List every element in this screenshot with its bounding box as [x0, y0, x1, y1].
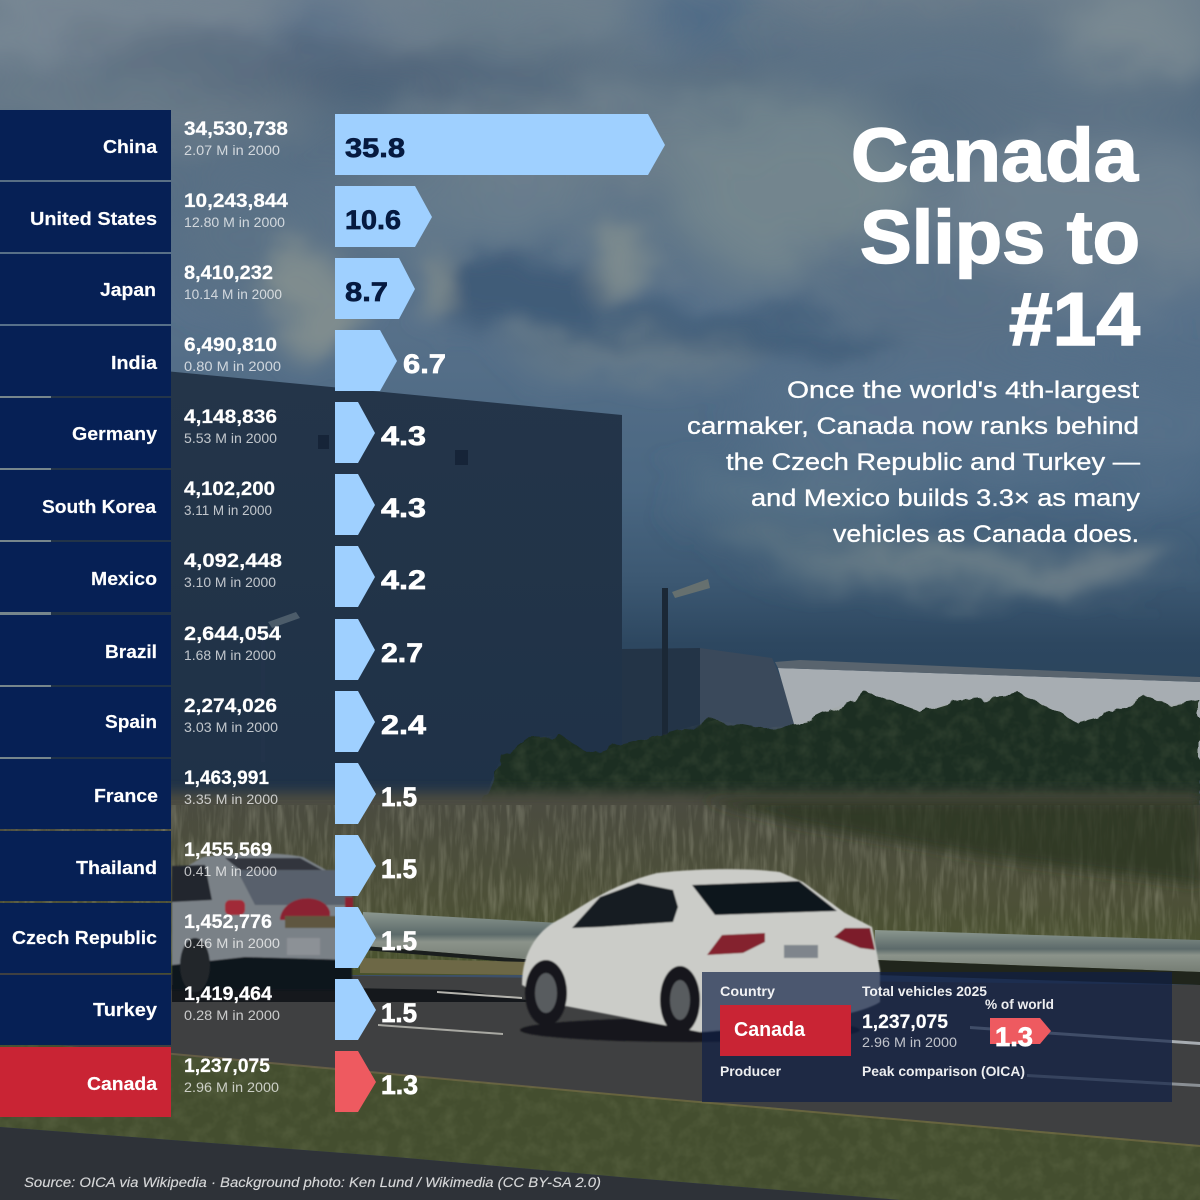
row: Germany: 5.53 M in 2000 [184, 431, 277, 446]
row: South Korea: 4,102,200 [184, 478, 275, 500]
row: Japan: 8,410,232 [184, 262, 273, 284]
row: Czech Republic: 0.46 M in 2000 [184, 936, 280, 951]
highway [0, 972, 1200, 1200]
row: Germany: Germany [72, 423, 158, 444]
row: Spain: 3.03 M in 2000 [184, 720, 278, 735]
row: United States: 10,243,844 [184, 190, 288, 212]
dark warehouse building [51, 360, 622, 800]
row: South Korea [0, 470, 426, 540]
row: Germany [0, 398, 426, 468]
legend totals: 2.96 M in 2000 [862, 1035, 957, 1050]
row: India: 0.80 M in 2000 [184, 359, 281, 374]
subtitle text block [687, 377, 1141, 548]
legend footers: Producer [720, 1064, 782, 1079]
legend column headers [720, 984, 1054, 1012]
bar chart: country production ranking [0, 110, 665, 1117]
row: Turkey: 1.5 [381, 998, 417, 1028]
row: Canada (highlighted): 2.96 M in 2000 [184, 1080, 279, 1095]
subtitle text block: and Mexico builds 3.3× as many [751, 485, 1141, 512]
row: Turkey [0, 975, 417, 1045]
row: Thailand: 1.5 [381, 854, 417, 884]
row: China: China [103, 136, 158, 157]
row: France: 3.35 M in 2000 [184, 792, 278, 807]
row: Mexico [0, 542, 426, 612]
row: France [0, 759, 417, 829]
row: Canada (highlighted): 1,237,075 [184, 1055, 270, 1077]
row: Germany: 4,148,836 [184, 406, 277, 428]
row: Mexico: Mexico [91, 568, 157, 589]
row: Czech Republic: Czech Republic [12, 927, 157, 948]
row: Turkey: Turkey [93, 999, 158, 1020]
row: India [0, 326, 446, 396]
title [851, 113, 1140, 361]
legend country chip: Canada [734, 1019, 806, 1041]
legend totals: 1,237,075 [862, 1011, 948, 1033]
row: United States: 10.6 [345, 205, 401, 235]
row: Germany: 4.3 [381, 421, 426, 451]
row: China: 34,530,738 [184, 118, 288, 140]
legend column headers: % of world [985, 997, 1054, 1012]
row: Canada (highlighted): Canada [87, 1073, 158, 1094]
title: Canada [851, 113, 1139, 197]
row: Brazil: 2,644,054 [184, 623, 281, 645]
white warehouse wall [775, 660, 1200, 760]
row: Japan: 10.14 M in 2000 [184, 287, 282, 302]
subtitle text block: carmaker, Canada now ranks behind [687, 413, 1139, 440]
subtitle text block: vehicles as Canada does. [833, 521, 1139, 548]
lower building [622, 648, 803, 800]
tree line [484, 690, 1200, 805]
row: China: 35.8 [345, 133, 405, 163]
legend column headers: Total vehicles 2025 [862, 984, 987, 999]
subtitle text block: Once the world's 4th-largest [787, 377, 1139, 404]
row: Thailand: Thailand [76, 857, 157, 878]
row: Canada (highlighted) [0, 1047, 418, 1117]
subtitle text block: the Czech Republic and Turkey — [726, 449, 1141, 476]
row: France: 1,463,991 [184, 767, 269, 789]
sky with clouds [0, 0, 1200, 760]
legend totals [862, 1011, 957, 1050]
row: Spain: 2,274,026 [184, 695, 277, 717]
row: Mexico: 3.10 M in 2000 [184, 575, 276, 590]
title: #14 [1009, 277, 1140, 361]
row: United States [0, 182, 432, 252]
white car [520, 869, 880, 1042]
row: Czech Republic: 1,452,776 [184, 911, 272, 933]
row: Brazil [0, 615, 423, 685]
legend share arrow: 1.3 [995, 1022, 1033, 1052]
row: Thailand: 0.41 M in 2000 [184, 864, 277, 879]
grey car [172, 853, 353, 992]
row: Czech Republic: 1.5 [381, 926, 417, 956]
legend share arrow [990, 1018, 1051, 1052]
row: South Korea: South Korea [42, 496, 157, 517]
legend footers [720, 1064, 1025, 1079]
row: South Korea: 3.11 M in 2000 [184, 503, 272, 518]
row: United States: 12.80 M in 2000 [184, 215, 285, 230]
title: Slips to [860, 195, 1140, 279]
row: France: France [94, 785, 158, 806]
legend country chip [720, 1005, 851, 1056]
roadside grass [0, 792, 1200, 975]
row: Brazil: Brazil [105, 641, 157, 662]
light poles [261, 579, 710, 762]
row: Thailand [0, 831, 417, 901]
row: Czech Republic [0, 903, 417, 973]
source credit: Source: OICA via Wikipedia · Background photo: Ken Lund / Wikimedia (CC BY-SA 2.0) [24, 1175, 601, 1190]
row: Turkey: 0.28 M in 2000 [184, 1008, 280, 1023]
row: France: 1.5 [381, 782, 417, 812]
row: Thailand: 1,455,569 [184, 839, 272, 861]
row: Japan: 8.7 [345, 277, 388, 307]
row: United States: United States [30, 208, 157, 229]
row: Canada (highlighted): 1.3 [381, 1070, 418, 1100]
row: Mexico: 4,092,448 [184, 550, 282, 572]
legend panel [702, 972, 1172, 1102]
row: Turkey: 1,419,464 [184, 983, 272, 1005]
row: Brazil: 1.68 M in 2000 [184, 648, 276, 663]
row: India: India [111, 352, 158, 373]
row: Brazil: 2.7 [381, 638, 423, 668]
legend column headers: Country [720, 984, 776, 999]
row: South Korea: 4.3 [381, 493, 426, 523]
row: Spain: Spain [105, 711, 157, 732]
row: Spain [0, 687, 426, 757]
row: Mexico: 4.2 [381, 565, 426, 595]
row: India: 6,490,810 [184, 334, 277, 356]
row: China [0, 110, 665, 180]
row: Spain: 2.4 [381, 710, 426, 740]
legend footers: Peak comparison (OICA) [862, 1064, 1025, 1079]
row: Japan: Japan [100, 279, 156, 300]
row: India: 6.7 [403, 349, 446, 379]
guard rail [360, 912, 1200, 985]
row: China: 2.07 M in 2000 [184, 143, 280, 158]
row: Japan [0, 254, 415, 324]
